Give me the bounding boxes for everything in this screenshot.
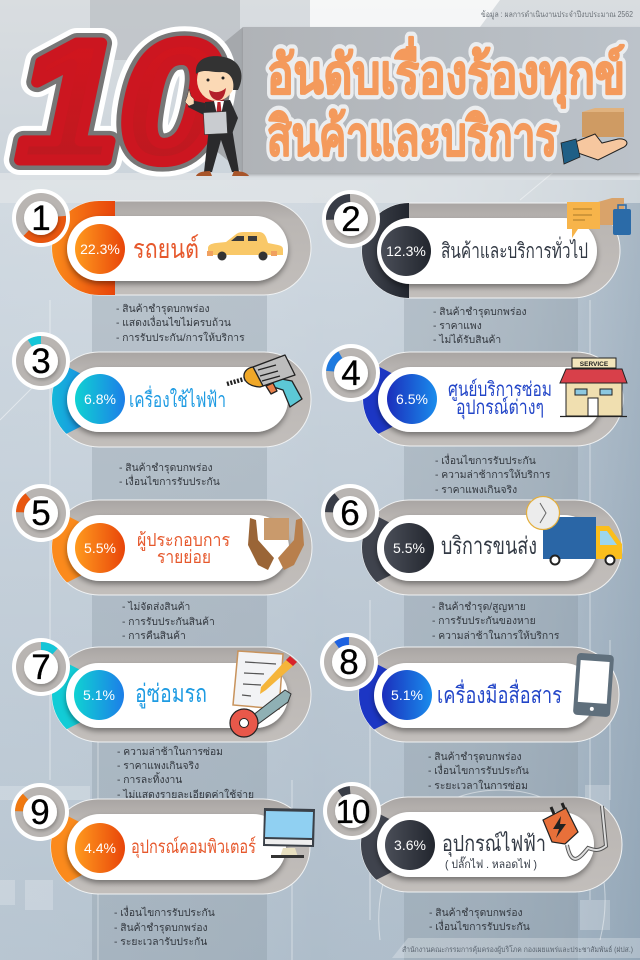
badge: 3: 3 [31, 342, 51, 381]
panel: 3: เครื่องใช้ไฟฟ้า [129, 385, 226, 412]
panel: 8 [337, 647, 619, 742]
bullet list: 1 [116, 303, 245, 344]
label: retailers: รายย่อย [157, 547, 211, 567]
icon: drill [227, 355, 302, 407]
icon: businessman [185, 56, 249, 176]
bullet list: 9: - เงื่อนไขการรับประกัน [114, 905, 215, 919]
badge: 7 [12, 638, 70, 696]
big number 10: 10 [17, 7, 222, 197]
label: service centre [448, 378, 552, 420]
label: electrical equipment: ( ปลั๊กไฟ . หลอดไฟ ) [445, 856, 537, 871]
panel: 7: 5.1% [83, 687, 115, 703]
bullet list: 8: - ระยะเวลาในการซ่อม [428, 780, 528, 792]
panel: 9: อุปกรณ์คอมพิวเตอร์ [131, 836, 256, 859]
panel: 4 [342, 352, 627, 446]
icon: service shop [560, 358, 627, 416]
panel: 10 [340, 797, 622, 892]
panel: 7 [29, 647, 311, 742]
bullet list: 2: - ไม่ได้รับสินค้า [433, 334, 501, 346]
label: retailers [137, 530, 230, 567]
bullet list: 1: - สินค้าชำรุดบกพร่อง [116, 303, 210, 315]
icon: box on hand [561, 108, 627, 164]
bullet list: 9: - สินค้าชำรุดบกพร่อง [114, 922, 208, 934]
bullet list: 3: - เงื่อนไขการรับประกัน [119, 474, 220, 488]
bullet list: 6 [432, 601, 560, 642]
bullet list: 8: - เงื่อนไขการรับประกัน [428, 763, 529, 777]
badge: 1 [12, 189, 70, 247]
panel: 4: 6.5% [396, 391, 428, 407]
bullet list: 4: - เงื่อนไขการรับประกัน [435, 453, 536, 467]
bullet list: 5: - การคืนสินค้า [122, 629, 186, 642]
big number 10: 10 [17, 7, 222, 197]
badge: 7: 7 [31, 648, 51, 687]
bullet list: 9: - ระยะเวลารับประกัน [114, 936, 207, 948]
label: service centre: ศูนย์บริการซ่อม [448, 378, 552, 402]
panel: 5 [30, 500, 312, 595]
bullet list: 3: - สินค้าชำรุดบกพร่อง [119, 462, 213, 474]
badge: 5 [12, 484, 70, 542]
bullet list: 5: - ไม่จัดส่งสินค้า [122, 601, 190, 613]
bullet list: 2 [433, 306, 527, 346]
label: service centre: อุปกรณ์ต่างๆ [456, 396, 544, 420]
panel: 1: 22.3% [80, 241, 120, 257]
bullet list: 7: - ราคาแพงเกินจริง [117, 760, 199, 772]
bullet list: 7: - การละทิ้งงาน [117, 772, 182, 786]
bullet list: 4 [435, 453, 551, 496]
badge: 1: 1 [31, 199, 51, 238]
badge: 8: 8 [339, 643, 359, 682]
bullet list: 5 [122, 601, 215, 642]
bullet list: 7: - ไม่แสดงรายละเอียดค่าใช้จ่าย [117, 789, 254, 801]
bullet list: 8 [428, 751, 529, 792]
bullet list: 9 [114, 905, 215, 948]
badge: 6: 6 [340, 494, 360, 533]
badge: 9: 9 [30, 793, 50, 832]
bullet list: 10: - เงื่อนไขการรับประกัน [429, 919, 530, 933]
icon: truck and clock [526, 496, 622, 564]
bullet list: 5: - การรับประกันสินค้า [122, 616, 215, 628]
bullet list: 1: - การรับประกัน/การให้บริการ [116, 332, 245, 344]
icon: car [207, 232, 283, 260]
panel: 5: 5.5% [84, 540, 116, 556]
bullet list: 10: - สินค้าชำรุดบกพร่อง [429, 907, 523, 919]
bullet list: 7: - ความล่าช้าในการซ่อม [117, 746, 223, 758]
panel: 10: 3.6% [394, 837, 426, 853]
bullet list: 8: - สินค้าชำรุดบกพร่อง [428, 751, 522, 763]
panel: 9: 4.4% [84, 840, 116, 856]
big number 10: 10 [17, 7, 222, 197]
bullet list: 4: - ราคาแพงเกินจริง [435, 484, 517, 496]
panel: 6 [339, 496, 622, 595]
badge: 4 [322, 344, 380, 402]
badge: 10: 10 [336, 793, 370, 830]
panel: 3 [30, 352, 311, 447]
badge: 5: 5 [31, 494, 51, 533]
footer credit [392, 938, 640, 958]
bullet list: 10 [429, 907, 530, 933]
badge: 2 [322, 190, 380, 248]
icon: service shop: SERVICE [580, 361, 609, 368]
panel: 6: บริการขนส่ง [441, 533, 537, 560]
icon: phone [573, 653, 614, 717]
bullet list: 6: - การรับประกันของหาย [432, 615, 536, 627]
title [267, 36, 625, 167]
badge: 6 [321, 484, 379, 542]
bullet list: 1: - แสดงเงื่อนไขไม่ครบถ้วน [116, 315, 231, 329]
bullet list: 2: - สินค้าชำรุดบกพร่อง [433, 306, 527, 318]
header band [215, 27, 640, 173]
icon: parcel and suitcase [567, 198, 631, 238]
panel: 2: สินค้าและบริการทั่วไป [441, 236, 588, 263]
badge: 2: 2 [341, 200, 361, 239]
badge: 8 [320, 633, 378, 691]
panel: 6: 5.5% [393, 540, 425, 556]
panel: 8: 5.1% [391, 687, 423, 703]
panel: 2: 12.3% [386, 243, 426, 259]
panel: 7: อู่ซ่อมรถ [135, 680, 207, 709]
panel: 8: เครื่องมือสื่อสาร [437, 679, 562, 708]
badge: 3 [12, 332, 70, 390]
panel: 1: รถยนต์ [133, 233, 199, 264]
icon: document, pencil and key [230, 651, 297, 737]
label: retailers: ผู้ประกอบการ [137, 530, 230, 551]
icon: hands holding box [248, 518, 304, 570]
badge: 10 [323, 782, 381, 840]
label: electrical equipment: อุปกรณ์ไฟฟ้า [442, 831, 546, 857]
panel: 2 [350, 197, 631, 302]
bullet list: 6: - สินค้าชำรุด/สูญหาย [432, 601, 526, 613]
bullet list: 4: - ความล่าช้าการให้บริการ [435, 469, 551, 481]
panel: 9 [30, 799, 315, 894]
icon: computer monitor [263, 808, 315, 858]
bullet list: 7 [117, 746, 254, 801]
panel: 1 [52, 200, 312, 296]
panel: 3: 6.8% [84, 391, 116, 407]
icon: electric plug [543, 803, 606, 859]
bullet list: 2: - ราคาแพง [433, 321, 482, 332]
bullet list: 3 [119, 462, 220, 488]
badge: 4: 4 [341, 354, 361, 393]
label: electrical equipment [442, 831, 546, 871]
badge: 9 [11, 783, 69, 841]
bullet list: 6: - ความล่าช้าในการให้บริการ [432, 630, 560, 642]
